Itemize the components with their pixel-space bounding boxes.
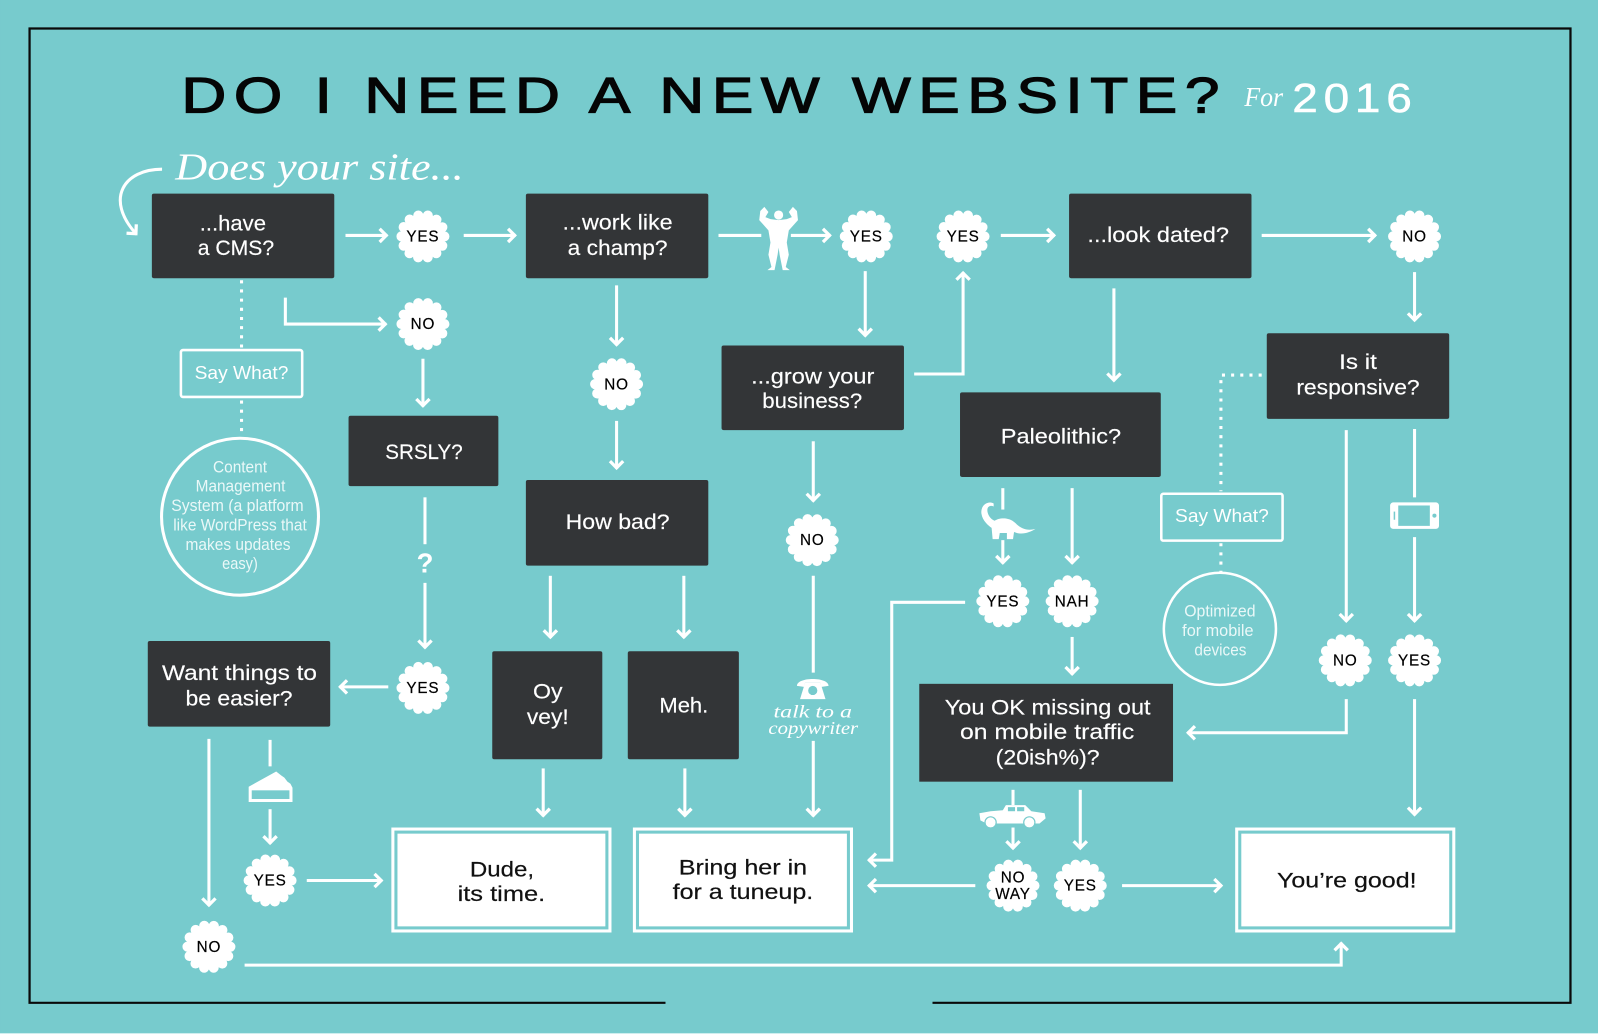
question: grow your business: ...grow your: [751, 364, 874, 388]
badge: yes: [942, 215, 984, 258]
question: mobile traffic: You OK missing out: [945, 696, 1151, 720]
callout: cms definition: Management: [196, 478, 286, 496]
question: look dated: ...look dated?: [1087, 223, 1229, 247]
badge: no way: [992, 864, 1034, 907]
question: srsly: [349, 416, 498, 486]
question: have a CMS: a CMS?: [198, 236, 274, 260]
callout: say what cms: [181, 350, 302, 397]
badge: no: [188, 925, 230, 968]
callout: cms definition: Content: [213, 458, 267, 476]
result: you're good: [1237, 829, 1454, 931]
question: have a CMS: [152, 194, 334, 278]
question: work like a champ: [526, 194, 708, 278]
result: bring her in: Bring her in: [679, 855, 807, 879]
question: want things easier: Want things to: [162, 661, 317, 685]
badge: no: [1324, 639, 1367, 682]
result: you're good: You’re good!: [1277, 869, 1417, 893]
badge: yes: YES: [406, 229, 439, 246]
answer: oy vey: [492, 651, 602, 759]
badge: no: NO: [800, 532, 825, 549]
badge: yes: [1393, 639, 1436, 682]
answer: meh: [628, 651, 739, 759]
script heading: Does your site...: [174, 146, 464, 188]
callout: cms definition: [162, 438, 318, 595]
icon: bodybuilder: [759, 207, 798, 270]
answer: oy vey: Oy: [533, 679, 563, 703]
result: dude its time: its time.: [458, 882, 545, 906]
title: DO I NEED A NEW WEBSITE?: [181, 68, 1227, 124]
question: look dated: [1069, 194, 1251, 278]
badge: yes: YES: [254, 873, 287, 890]
result: dude its time: Dude,: [470, 857, 534, 881]
badge: no: [791, 519, 834, 562]
result: bring her in: for a tuneup.: [673, 880, 813, 904]
question mark icon: ?: [417, 548, 433, 579]
question: is it responsive: responsive?: [1296, 376, 1420, 400]
badge: yes: [845, 215, 888, 258]
question: how bad: [526, 480, 708, 566]
question: srsly: SRSLY?: [385, 440, 463, 464]
badge: yes: YES: [986, 593, 1019, 610]
question: grow your business: [722, 345, 904, 430]
icon: car: [979, 805, 1046, 828]
badge: yes: YES: [1398, 652, 1431, 669]
badge: no: NO: [1402, 229, 1427, 246]
callout: cms definition: easy): [222, 555, 258, 573]
callout: responsive definition: [1164, 573, 1276, 685]
question: how bad: How bad?: [566, 510, 670, 534]
badge: nah: NAH: [1055, 593, 1089, 610]
answer: meh: Meh.: [659, 694, 708, 718]
callout: say what responsive: Say What?: [1175, 505, 1269, 526]
callout: say what responsive: [1161, 494, 1283, 541]
badge: no: NO: [1333, 652, 1358, 669]
badge: yes: YES: [947, 229, 980, 246]
question: mobile traffic: (20ish%)?: [996, 746, 1100, 770]
icon: smartphone: [1390, 502, 1439, 529]
badge: no way: NO: [1001, 870, 1025, 887]
badge: yes: [402, 667, 444, 709]
talk to a copywriter: [768, 701, 859, 738]
question: want things easier: [148, 641, 330, 727]
start arrow: [120, 169, 162, 234]
badge: no: NO: [197, 939, 221, 956]
icon: pie slice: [249, 771, 292, 802]
subtitle: for 2016: 2016: [1292, 75, 1418, 121]
icon: telephone: [797, 679, 829, 699]
icon: dinosaur: [981, 503, 1035, 539]
badge: no: NO: [604, 376, 629, 393]
question: grow your business: business?: [762, 389, 862, 413]
question: paleolithic: [960, 392, 1161, 477]
badge: no: NO: [411, 316, 435, 333]
subtitle: for 2016: [1243, 75, 1418, 121]
dotted connectors: [242, 280, 1262, 573]
badge: no: [595, 363, 638, 406]
subtitle: for 2016: For: [1243, 81, 1283, 112]
question: paleolithic: Paleolithic?: [1001, 425, 1121, 449]
badge: no: [402, 303, 444, 345]
question: have a CMS: ...have: [200, 212, 266, 236]
callout: responsive definition: Optimized: [1184, 603, 1256, 621]
question: work like a champ: ...work like: [563, 211, 673, 235]
talk to a copywriter: copywriter: [768, 718, 859, 738]
answer: oy vey: vey!: [527, 705, 569, 729]
badge: nah: [1051, 580, 1094, 623]
callout: responsive definition: for mobile: [1182, 622, 1254, 640]
result: dude its time: [393, 829, 610, 931]
question: work like a champ: a champ?: [568, 236, 668, 260]
question: want things easier: be easier?: [185, 687, 293, 711]
question: mobile traffic: on mobile traffic: [960, 720, 1135, 744]
question: is it responsive: [1267, 333, 1449, 419]
flow arrows: [209, 235, 1415, 965]
callout: cms definition: makes updates: [185, 536, 290, 554]
badge: yes: YES: [1064, 878, 1097, 895]
badge: yes: YES: [406, 680, 439, 697]
badge: yes: [1059, 864, 1102, 907]
result: bring her in: [634, 829, 851, 931]
callout: cms definition: like WordPress that: [173, 516, 307, 534]
badge: yes: YES: [850, 229, 883, 246]
badge: no way: WAY: [995, 886, 1031, 903]
callout: cms definition: System (a platform: [171, 497, 304, 515]
badge: yes: [249, 859, 291, 902]
badge: yes: [981, 580, 1024, 623]
callout: say what cms: Say What?: [195, 362, 288, 383]
question: is it responsive: Is it: [1339, 350, 1377, 374]
callout: responsive definition: devices: [1194, 641, 1246, 659]
talk to a copywriter: talk to a: [774, 701, 852, 721]
question: mobile traffic: [919, 684, 1173, 782]
badge: no: [1393, 215, 1436, 258]
badge: yes: [402, 215, 444, 258]
